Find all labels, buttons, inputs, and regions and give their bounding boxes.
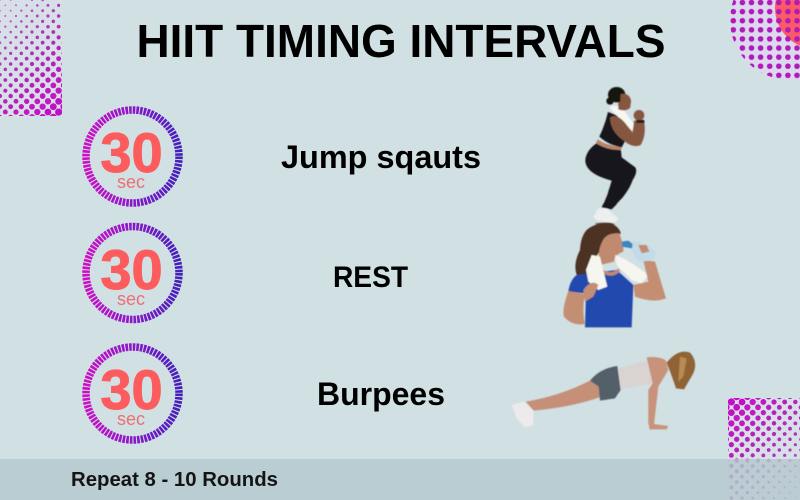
timer: jump squats 30 sec (86, 110, 179, 203)
timer: rest 30 sec (86, 226, 179, 320)
timer: burpees 30 sec: sec (117, 409, 145, 429)
timer: jump squats 30 sec: sec (117, 172, 145, 192)
halftone circle with red disc: top right (730, 0, 800, 80)
photo: woman in jump squat (585, 87, 645, 225)
label: burpees: Burpees (317, 376, 445, 412)
label: jump squats: Jump sqauts (281, 139, 481, 175)
footer band (0, 459, 800, 500)
photo: woman in plank (512, 352, 695, 429)
timer: rest 30 sec: 30 (100, 238, 163, 301)
photo: woman drinking water (563, 223, 666, 327)
footer text: Repeat 8 - 10 Rounds (71, 469, 278, 491)
timer: burpees 30 sec: 30 (100, 358, 163, 421)
halftone pattern: bottom right (670, 327, 800, 500)
title: HIIT TIMING INTERVALS (136, 15, 666, 67)
halftone pattern: top left (0, 0, 120, 187)
timer: burpees 30 sec (86, 347, 179, 440)
label: rest: REST (333, 261, 408, 294)
timer: jump squats 30 sec: 30 (100, 121, 163, 184)
timer: rest 30 sec: sec (117, 289, 145, 309)
